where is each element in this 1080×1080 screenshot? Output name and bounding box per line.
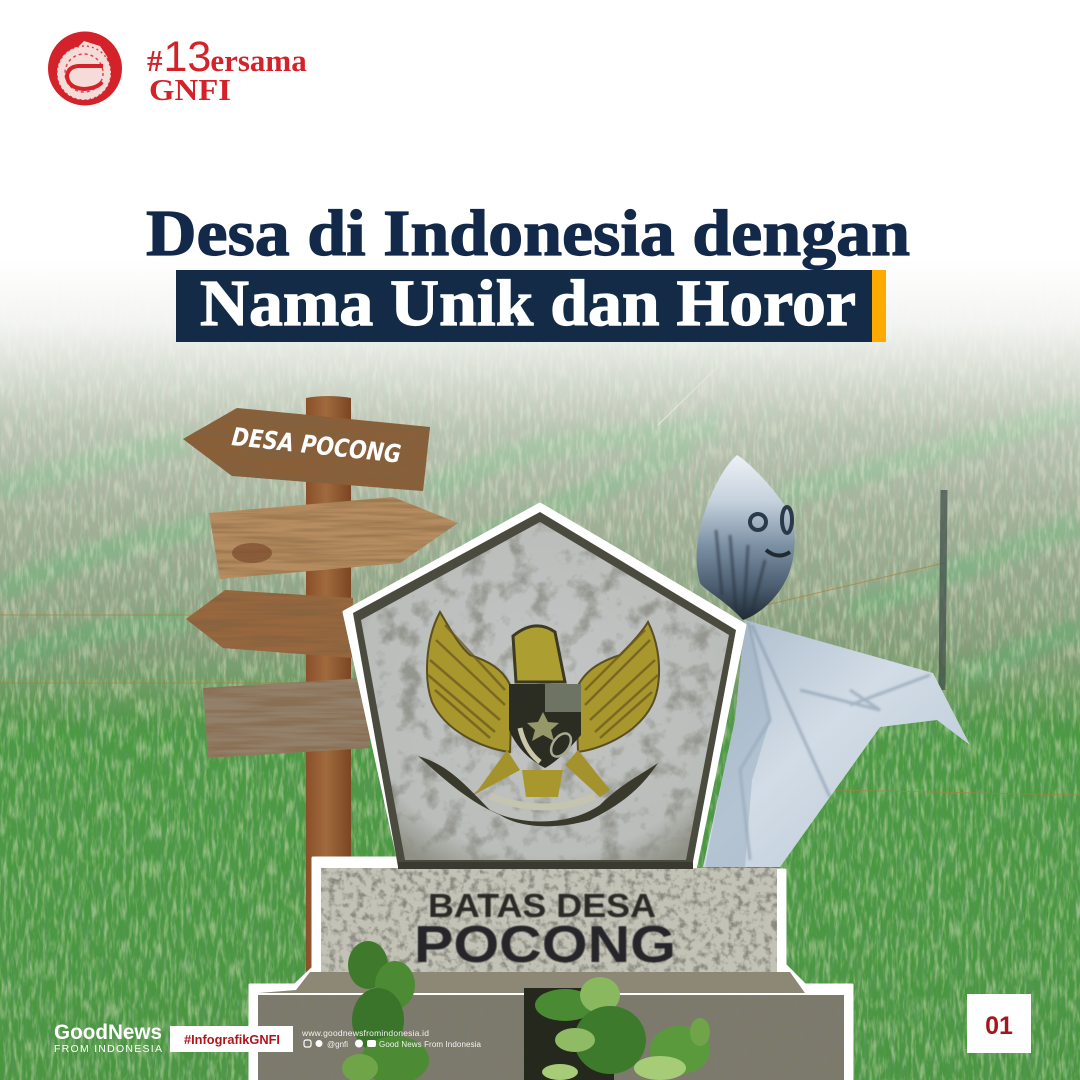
website and social handles: www.goodnewsfromindonesia.id xyxy=(301,1028,429,1038)
website and social handles: Good News From Indonesia xyxy=(379,1040,482,1049)
sign: blank plank xyxy=(203,678,370,758)
hashtag box xyxy=(170,1026,293,1052)
sign: Desa Pocong xyxy=(183,408,430,491)
sign: Desa Pocong: DESA POCONG xyxy=(230,422,402,469)
text: #13ersama: #13ersama xyxy=(147,33,307,81)
sign: blank right arrow xyxy=(209,497,458,579)
plinth with inscription xyxy=(321,862,777,975)
plants growing in front of the stone xyxy=(342,941,710,1080)
icon: GNFI serpent emblem xyxy=(48,32,122,106)
emblem: Garuda Pancasila xyxy=(418,612,659,826)
plinth with inscription: BATAS DESA xyxy=(428,887,656,924)
footer branding xyxy=(54,1021,482,1055)
sign: blank left arrow xyxy=(186,590,353,658)
pentagon stone xyxy=(353,512,736,867)
boundary monument with white cutout outline xyxy=(250,504,852,1080)
text: GNFI: GNFI xyxy=(149,72,231,107)
scarecrow xyxy=(697,455,970,867)
logo: GoodNews from Indonesia: FROM INDONESIA xyxy=(54,1043,162,1055)
signpost xyxy=(183,396,458,975)
title line 2 with highlight: Nama Unik dan Horor xyxy=(200,267,856,340)
base stone xyxy=(258,972,844,1080)
scarecrow head xyxy=(697,455,795,620)
website and social handles xyxy=(301,1028,482,1049)
fence post xyxy=(942,490,944,690)
plinth with inscription: POCONG xyxy=(414,916,676,974)
hashtag box: #InfografikGNFI xyxy=(184,1032,280,1047)
website and social handles: @gnfi xyxy=(327,1040,348,1049)
scarecrow body xyxy=(703,620,970,867)
page number badge: 01 xyxy=(985,1012,1013,1040)
title line 1: Desa di Indonesia dengan xyxy=(146,197,910,270)
page number badge xyxy=(967,994,1031,1053)
logo: #13ersama GNFI xyxy=(48,32,307,107)
logo: GoodNews from Indonesia: GoodNews xyxy=(54,1021,162,1044)
logo: GoodNews from Indonesia xyxy=(54,1021,162,1055)
post xyxy=(306,396,351,975)
